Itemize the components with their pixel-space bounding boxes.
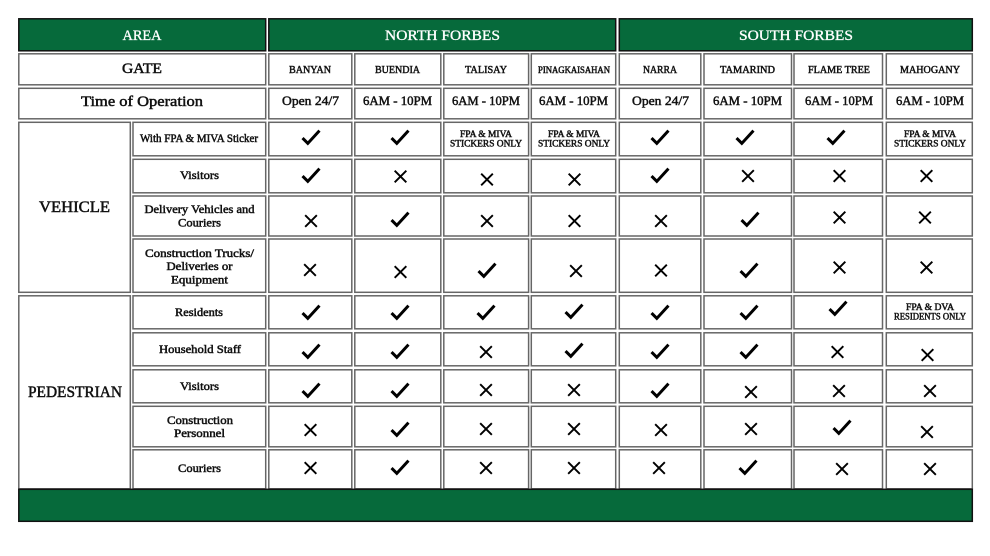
row label bbox=[133, 196, 266, 236]
mahogany bbox=[886, 159, 972, 193]
heading: north forbes bbox=[269, 19, 616, 51]
tamarind bbox=[704, 239, 792, 292]
talisay bbox=[444, 196, 529, 236]
banyan bbox=[269, 159, 352, 193]
talisay note: STICKERS ONLY bbox=[450, 140, 522, 150]
row label bbox=[133, 122, 266, 156]
pinagkaisahan bbox=[531, 333, 616, 366]
talisay bbox=[444, 159, 529, 193]
row: residents bbox=[133, 296, 972, 329]
pinagkaisahan bbox=[531, 406, 616, 447]
row: with FPA and MIVA sticker bbox=[133, 122, 972, 156]
row: couriers bbox=[133, 450, 972, 489]
tamarind bbox=[704, 450, 792, 489]
gate: talisay bbox=[444, 54, 529, 85]
mahogany note: FPA & MIVA bbox=[904, 130, 956, 140]
narra bbox=[619, 239, 701, 292]
hours: banyan bbox=[269, 88, 352, 119]
pinagkaisahan bbox=[531, 196, 616, 236]
banyan bbox=[269, 333, 352, 366]
pinagkaisahan note: STICKERS ONLY bbox=[538, 140, 610, 150]
buendia bbox=[355, 239, 441, 292]
row label bbox=[133, 333, 266, 366]
talisay bbox=[444, 370, 529, 403]
mahogany bbox=[886, 239, 972, 292]
gate: buendia bbox=[355, 54, 441, 85]
flame tree bbox=[794, 450, 882, 489]
hours: narra: Open 24/7 bbox=[632, 93, 690, 108]
banyan bbox=[269, 122, 352, 156]
hours: tamarind: 6AM - 10PM bbox=[713, 93, 782, 108]
mahogany bbox=[886, 333, 972, 366]
buendia bbox=[355, 333, 441, 366]
banyan bbox=[269, 239, 352, 292]
gate: flame tree bbox=[794, 54, 882, 85]
row label: Visitors bbox=[180, 381, 220, 393]
talisay note: FPA & MIVA bbox=[460, 130, 512, 140]
mahogany bbox=[886, 370, 972, 403]
header row bbox=[19, 19, 972, 51]
tamarind bbox=[704, 159, 792, 193]
gate label: GATE bbox=[122, 61, 162, 77]
talisay bbox=[444, 296, 529, 329]
hours: mahogany bbox=[886, 88, 972, 119]
heading: south forbes: SOUTH FORBES bbox=[739, 28, 853, 44]
hours: flame tree bbox=[794, 88, 882, 119]
gate: mahogany bbox=[886, 54, 972, 85]
gate: pinagkaisahan: PINAGKAISAHAN bbox=[538, 66, 610, 76]
flame tree bbox=[794, 239, 882, 292]
talisay note bbox=[444, 122, 529, 156]
tamarind bbox=[704, 196, 792, 236]
mahogany bbox=[886, 450, 972, 489]
flame tree bbox=[794, 333, 882, 366]
gate: mahogany: MAHOGANY bbox=[900, 65, 960, 76]
talisay bbox=[444, 239, 529, 292]
hours: buendia: 6AM - 10PM bbox=[363, 93, 432, 108]
pinagkaisahan bbox=[531, 450, 616, 489]
flame tree bbox=[794, 296, 882, 329]
pinagkaisahan bbox=[531, 370, 616, 403]
time of operation label bbox=[19, 88, 266, 119]
mahogany note bbox=[886, 296, 972, 329]
row label bbox=[133, 406, 266, 447]
flame tree bbox=[794, 406, 882, 447]
row label bbox=[133, 296, 266, 329]
pinagkaisahan bbox=[531, 239, 616, 292]
flame tree bbox=[794, 122, 882, 156]
tamarind bbox=[704, 296, 792, 329]
row: delivery vehicles and couriers bbox=[133, 196, 972, 236]
hours: buendia bbox=[355, 88, 441, 119]
gate: narra: NARRA bbox=[643, 65, 677, 76]
row label: With FPA & MIVA Sticker bbox=[140, 133, 258, 145]
gate: tamarind: TAMARIND bbox=[720, 65, 775, 76]
hours: talisay: 6AM - 10PM bbox=[452, 93, 520, 108]
tamarind bbox=[704, 370, 792, 403]
tamarind bbox=[704, 122, 792, 156]
row label: Residents bbox=[175, 307, 224, 319]
hours: flame tree: 6AM - 10PM bbox=[805, 93, 873, 108]
flame tree bbox=[794, 159, 882, 193]
hours: pinagkaisahan: 6AM - 10PM bbox=[539, 93, 608, 108]
pinagkaisahan bbox=[531, 296, 616, 329]
row label: Construction Trucks/ bbox=[145, 248, 255, 260]
gate: tamarind bbox=[704, 54, 792, 85]
buendia bbox=[355, 450, 441, 489]
narra bbox=[619, 333, 701, 366]
buendia bbox=[355, 406, 441, 447]
row label: Couriers bbox=[178, 463, 222, 475]
buendia bbox=[355, 122, 441, 156]
row label: Equipment bbox=[171, 274, 229, 286]
banyan bbox=[269, 196, 352, 236]
mahogany note: FPA & DVA bbox=[906, 303, 954, 313]
mahogany note bbox=[886, 122, 972, 156]
buendia bbox=[355, 159, 441, 193]
pinagkaisahan note: FPA & MIVA bbox=[548, 130, 600, 140]
row: pedestrian visitors bbox=[133, 370, 972, 403]
flame tree bbox=[794, 196, 882, 236]
gate: pinagkaisahan bbox=[531, 54, 616, 85]
row: household staff bbox=[133, 333, 972, 366]
row: vehicle visitors bbox=[133, 159, 972, 193]
gate: banyan: BANYAN bbox=[289, 65, 331, 76]
section label: pedestrian: PEDESTRIAN bbox=[28, 384, 122, 401]
gate: narra bbox=[619, 54, 701, 85]
section label: vehicle: VEHICLE bbox=[39, 199, 110, 216]
heading: area: AREA bbox=[122, 28, 162, 44]
heading: north forbes: NORTH FORBES bbox=[385, 28, 500, 44]
row label bbox=[133, 370, 266, 403]
banyan bbox=[269, 296, 352, 329]
row label: Deliveries or bbox=[166, 261, 233, 273]
row: construction trucks, deliveries or equipment bbox=[133, 239, 972, 292]
mahogany bbox=[886, 406, 972, 447]
buendia bbox=[355, 370, 441, 403]
narra bbox=[619, 406, 701, 447]
talisay bbox=[444, 450, 529, 489]
pinagkaisahan note bbox=[531, 122, 616, 156]
hours: mahogany: 6AM - 10PM bbox=[896, 93, 964, 108]
section label: pedestrian bbox=[19, 296, 130, 489]
banyan bbox=[269, 450, 352, 489]
gate label bbox=[19, 54, 266, 85]
section label: vehicle bbox=[19, 122, 130, 292]
hours: banyan: Open 24/7 bbox=[282, 93, 340, 108]
talisay bbox=[444, 406, 529, 447]
narra bbox=[619, 159, 701, 193]
row label: Construction bbox=[167, 415, 233, 427]
narra bbox=[619, 122, 701, 156]
narra bbox=[619, 370, 701, 403]
mahogany note: STICKERS ONLY bbox=[894, 140, 966, 150]
flame tree bbox=[794, 370, 882, 403]
time of operation row bbox=[19, 88, 972, 119]
row label: Delivery Vehicles and bbox=[144, 204, 255, 216]
mahogany note: RESIDENTS ONLY bbox=[894, 312, 966, 322]
heading: area bbox=[19, 19, 266, 51]
time of operation label: Time of Operation bbox=[81, 94, 204, 110]
row label: Visitors bbox=[180, 170, 220, 182]
buendia bbox=[355, 296, 441, 329]
row label: Couriers bbox=[178, 218, 222, 230]
buendia bbox=[355, 196, 441, 236]
narra bbox=[619, 296, 701, 329]
hours: tamarind bbox=[704, 88, 792, 119]
row label bbox=[133, 239, 266, 292]
row label bbox=[133, 159, 266, 193]
hours: talisay bbox=[444, 88, 529, 119]
row label: Household Staff bbox=[159, 344, 241, 356]
tamarind bbox=[704, 406, 792, 447]
gate: buendia: BUENDIA bbox=[375, 65, 420, 76]
hours: pinagkaisahan bbox=[531, 88, 616, 119]
pinagkaisahan bbox=[531, 159, 616, 193]
gate: banyan bbox=[269, 54, 352, 85]
row: construction personnel bbox=[133, 406, 972, 447]
heading: south forbes bbox=[619, 19, 972, 51]
tamarind bbox=[704, 333, 792, 366]
row label: Personnel bbox=[174, 428, 225, 440]
gate: flame tree: FLAME TREE bbox=[808, 65, 870, 76]
mahogany bbox=[886, 196, 972, 236]
gate row bbox=[19, 54, 972, 85]
gate: talisay: TALISAY bbox=[465, 65, 507, 76]
narra bbox=[619, 196, 701, 236]
banyan bbox=[269, 370, 352, 403]
banyan bbox=[269, 406, 352, 447]
footer bar bbox=[19, 489, 972, 521]
hours: narra bbox=[619, 88, 701, 119]
row label bbox=[133, 450, 266, 489]
talisay bbox=[444, 333, 529, 366]
narra bbox=[619, 450, 701, 489]
